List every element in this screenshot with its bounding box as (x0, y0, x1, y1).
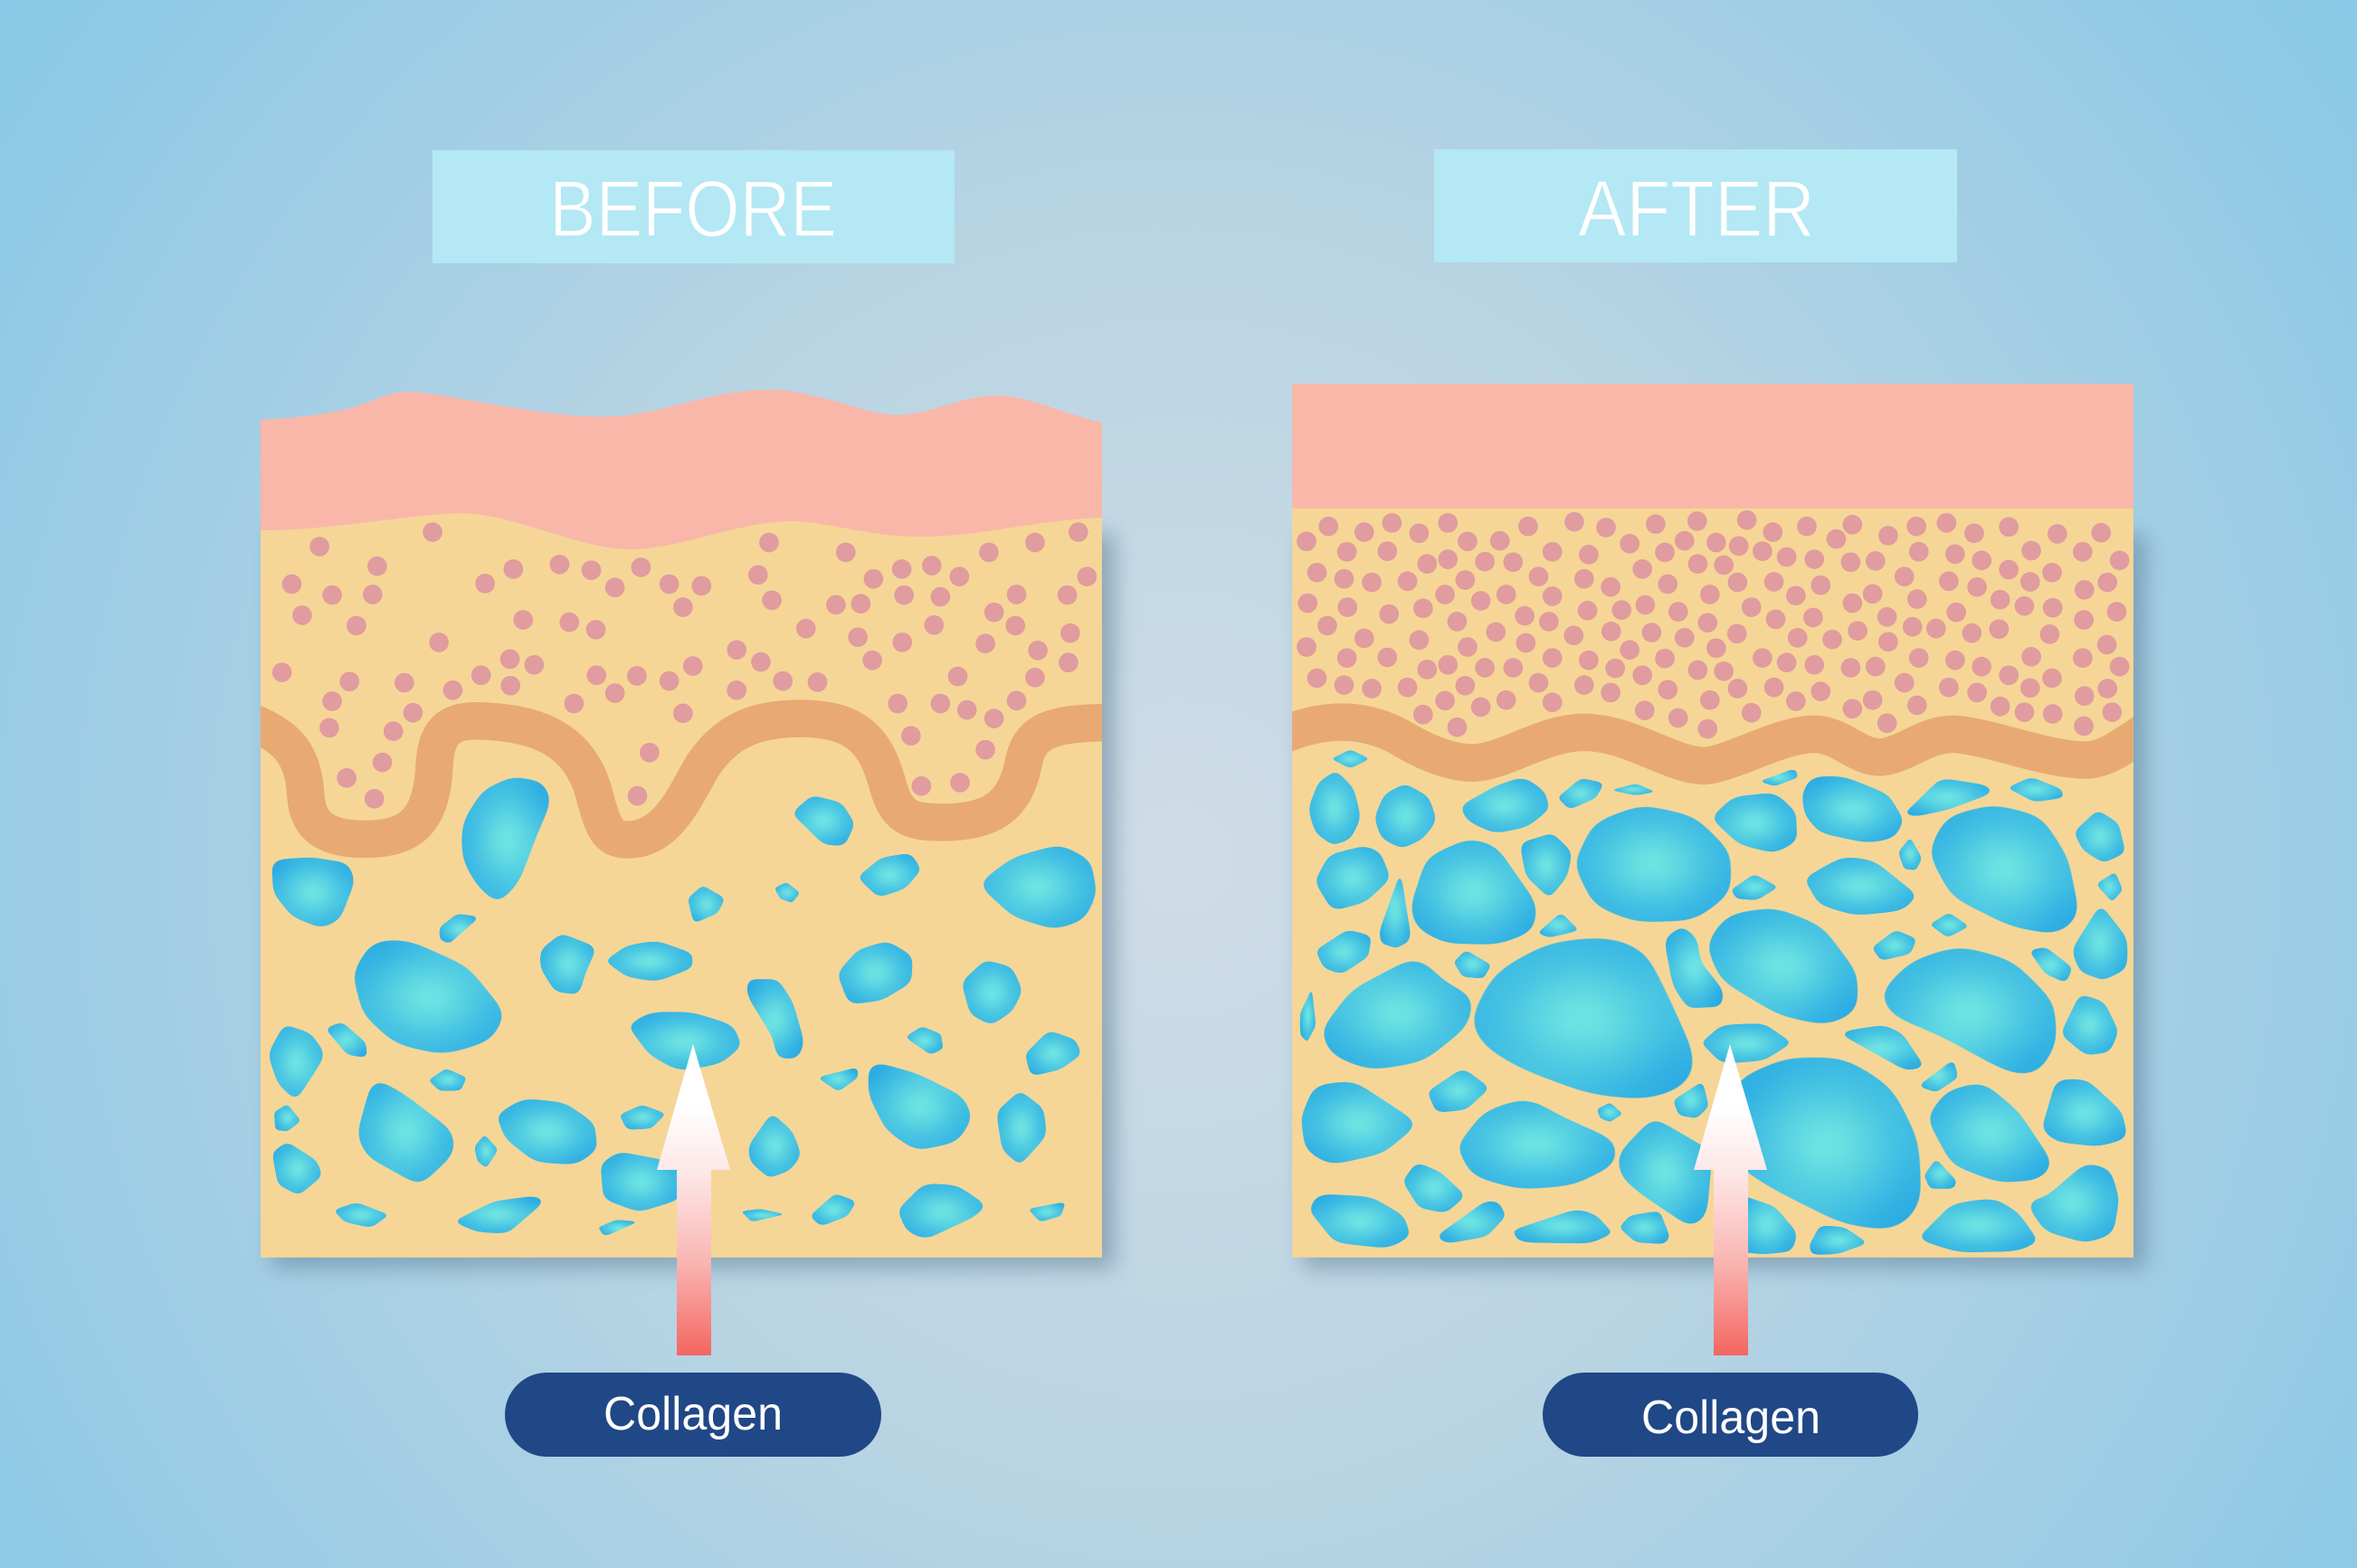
heading: BEFORE (432, 150, 955, 263)
panel: before skin (252, 390, 1112, 1258)
label: Collagen after (1543, 1373, 1918, 1457)
heading: BEFORE: BEFORE (549, 164, 837, 253)
epidermis flat layer (1292, 384, 2134, 508)
shadow: after panel (1303, 534, 2146, 1269)
epidermis wavy layer (261, 390, 1102, 549)
arrow: before collagen (657, 1044, 730, 1355)
shadow: before panel (271, 534, 1115, 1269)
pink dots sparse (272, 522, 1097, 809)
label: Collagen before (505, 1373, 881, 1457)
dermis base (261, 478, 1102, 1258)
dermis base (1292, 506, 2134, 1258)
heading: AFTER: AFTER (1578, 164, 1815, 253)
pink dots dense (1297, 510, 2129, 738)
label: Collagen before: Collagen (604, 1388, 783, 1440)
basement membrane band (1280, 722, 2150, 765)
panel: after skin (1280, 384, 2150, 1258)
blue fat cells sparse (269, 778, 1095, 1239)
basement membrane band (252, 718, 1112, 840)
blue fat cells dense (1300, 750, 2126, 1255)
heading: AFTER (1434, 149, 1957, 262)
arrow: after collagen (1694, 1044, 1767, 1355)
label: Collagen after: Collagen (1641, 1392, 1820, 1444)
